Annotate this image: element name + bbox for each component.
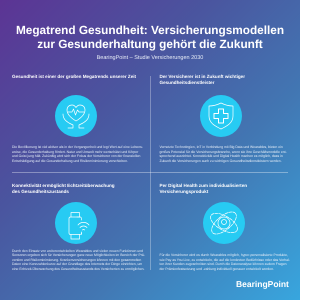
title: [16, 23, 284, 51]
body: digital health: wie Pay as You Live, zu entwickeln, die auf die konkreten Bedürfnisse oder das Verhal-: [160, 258, 290, 262]
body: insurer: Vernetzte Technologien, IoT in Verbindung mit Big Data und Wearables, bieten ein: [160, 145, 283, 149]
body: megatrend: Entschädigung auf die Gesunderhaltung und Risikominimierung verschieben.: [12, 159, 128, 163]
heading: megatrend: Gesundheit ist einer der großen Megatrends unserer Zeit: [12, 74, 136, 79]
body: connectivity: Durch den Einsatz von weiterentwickelten Wearables und vielen neuen Funktionen und: [12, 248, 143, 252]
body: digital health: der Prämienfestsetzung und -zahlung individuell genauer entwickelt werden.: [160, 267, 274, 271]
icon: shield with cross: [200, 95, 242, 137]
body: digital health: [160, 253, 290, 271]
body: insurer: Zukunft die Versicherungen auch zu wichtigen Gesundheitsdienstleistern werden.: [160, 159, 282, 163]
body: connectivity: vention und Risikominimierung. Krankenversicherungen können mit den gesammelten: [12, 258, 141, 262]
heading: insurer: [160, 74, 245, 85]
body: insurer: [160, 145, 287, 163]
icon: heart in hands: [55, 95, 97, 137]
body: connectivity: Daten eine Kennzahlenkurve auf der Grundlage des Internets der Dinge einrichten, um: [12, 262, 142, 266]
heading: connectivity: des Gesundheitszustands: [12, 189, 69, 194]
heading: insurer: Der Versicherer ist in Zukunft wichtiger: [160, 74, 245, 79]
panel: insurer: [160, 74, 287, 163]
body: digital health: ten ihrer Kunden zugeschnitten sind. Durch die Datenanalyse können zudem Fragen: [160, 262, 287, 266]
body: digital health: Für die Versicherer wird es durch Wearables möglich, hyper-personalisierte Produkte,: [160, 253, 288, 257]
title: zur Gesunderhaltung gehört die Zukunft: [37, 37, 263, 51]
horizontal divider: [12, 172, 288, 173]
body: insurer: sprechend ausrichtet. Konnektivität und Digital Health machen es möglich, dass in: [160, 154, 283, 158]
icon: smartwatch with wifi: [55, 202, 97, 244]
heading: insurer: Gesundheitsdienstleister: [160, 80, 214, 85]
body: connectivity: [12, 248, 145, 271]
panel: megatrend: [12, 74, 143, 163]
body: megatrend: weise, die Gesunderhaltung fördert. Natur und Umwelt mehr wertschätzt und Körper: [12, 150, 138, 154]
title: Megatrend Gesundheit: Versicherungsmodellen: [16, 23, 284, 37]
body: megatrend: Die Bevölkerung ist viel aktiver als in der Vergangenheit und legt Wert auf eine Lebens-: [12, 145, 143, 149]
body: megatrend: und Geist jung hält. Zukünftig wird sich der Fokus der Versicherer von der finanziellen: [12, 154, 140, 158]
heading: connectivity: [12, 183, 115, 194]
heading: digital health: [160, 183, 247, 194]
body: connectivity: Sensoren ergeben sich für Versicherungen ganz neue Möglichkeiten im Bereich der Prä-: [12, 253, 145, 257]
body: megatrend: [12, 145, 143, 163]
heading: digital health: Per Digital Health zum individualisierten: [160, 183, 247, 188]
body: insurer: großes Potenzial für die Versicherungsbranche, wenn sie ihre Geschäftsmodelle ent-: [160, 150, 287, 154]
body: connectivity: eine Echtzeit-Überwachung des Gesundheitszustands des Versicherten zu ermöglichen.: [12, 267, 144, 271]
heading: digital health: Versicherungsprodukt: [160, 189, 208, 194]
panel: digital health: [160, 183, 290, 271]
vertical divider: [150, 76, 151, 270]
logo: BearingPoint: [236, 279, 289, 289]
heading: connectivity: Konnektivität ermöglicht Echtzeitüberwachung: [12, 183, 115, 188]
subtitle: BearingPoint – Studie Versicherungen 2030: [97, 55, 203, 61]
icon: atom orbit: [203, 202, 245, 244]
panel: connectivity: [12, 183, 145, 271]
